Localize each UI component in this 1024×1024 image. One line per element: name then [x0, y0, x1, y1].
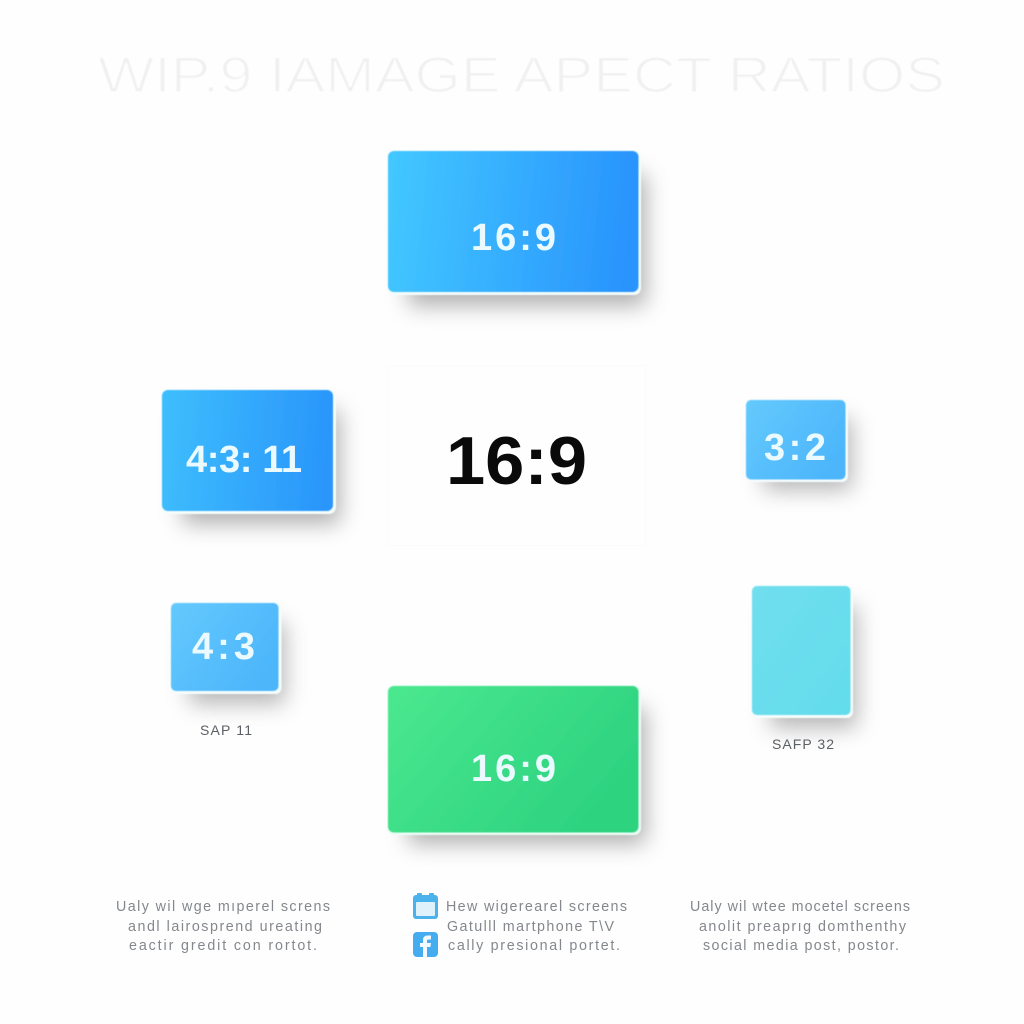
text block: left description: eactir gredit con rortot. [129, 938, 317, 954]
card: left 4:3:11 [161, 389, 340, 524]
text block: centre description: cally presional portet. [448, 938, 620, 954]
text block: left description [116, 899, 330, 954]
centre ratio text: 16:9 [446, 423, 587, 499]
label: top card ratio: 16:9 [471, 217, 556, 259]
label: left card ratio: 4:3: 11 [186, 439, 302, 481]
text block: left description: andl lairosprend ureating [128, 919, 322, 935]
card: top 16:9 [387, 150, 646, 306]
text block: right description: social media post, postor. [703, 938, 899, 954]
card: portrait face [751, 585, 853, 718]
text block: right description [690, 899, 910, 954]
card: right 3:2 [745, 399, 852, 490]
card: portrait shadow [770, 606, 857, 728]
text block: right description: Ualy wil wtee mocetel screens [690, 899, 910, 915]
card: lower left 4:3 [170, 602, 285, 704]
icon: folder calendar [413, 893, 438, 919]
label: right card ratio: 3:2 [764, 427, 826, 469]
card: bottom green 16:9 [387, 685, 646, 844]
label: lower left card ratio: 4:3 [192, 626, 255, 668]
caption: SAP 11: SAP 11 [200, 722, 252, 738]
caption: SAFP 32: SAFP 32 [772, 736, 834, 752]
label: green card ratio: 16:9 [471, 748, 556, 790]
text block: centre description: Hew wigerearel screens [446, 899, 627, 915]
text block: left description: Ualy wil wge mıperel screns [116, 899, 330, 915]
panel: centre ratio [388, 366, 646, 546]
icon: facebook [413, 932, 438, 957]
text block: centre description [446, 899, 627, 954]
text block: centre description: Gatulll martphone T\V [447, 919, 614, 935]
text block: right description: anolit preaprıg domthenthy [699, 919, 907, 935]
title: WIP.9 IAMAGE APECT RATIOS [98, 47, 945, 103]
